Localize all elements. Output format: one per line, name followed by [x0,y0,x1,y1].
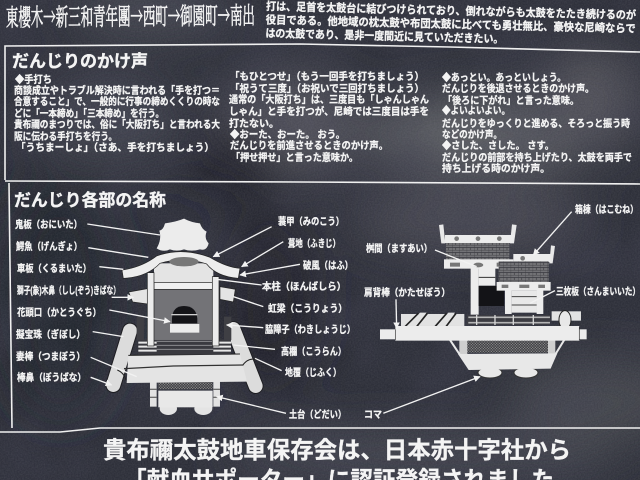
text column 2: ◆おーた、おーた。 おう。 [230,129,345,141]
labels: left of front view: 鰐魚（げんぎょ） [16,240,82,253]
text column 2: 打たない。 [229,117,279,130]
icon: railing base [467,315,550,325]
icon: shoulder beam [380,326,587,341]
text column 1: 阪に伝わる手打ちを行う。 [14,130,117,143]
icon: carrying poles [113,329,257,386]
bottom announcement: 貴布禰太鼓地車保存会は、日本赤十字社から [103,437,571,463]
text column 3: ◆よいよいよい。 [442,105,510,117]
labels: side view [364,203,640,421]
labels: right of front view: 葺地（ふきじ） [288,237,340,250]
labels: right of front view: 地覆（じふく） [285,366,341,379]
text column 1: ◆手打ち [15,73,52,86]
icon: upper wall, beam and columns [147,263,219,346]
labels: left of front view: 花頭口（かとうぐち） [17,306,101,319]
text column 3: 「後ろに下がれ」と言った意味。 [443,94,579,107]
icon: roof [122,252,240,278]
text column 3: などのかけ声。 [442,128,502,141]
icon: body panel with arch [137,288,231,340]
labels: right of front view: 土台（どだい） [289,408,346,421]
labels: left of front view: 擬宝珠（ぎぼし） [16,328,85,341]
text column 2: 「押せ押せ」と言った意味か。 [231,151,358,164]
icon: railing steps [138,339,231,355]
text column 1: 貴布禰のまつりでは、俗に「大阪打ち」と言われる大 [14,118,220,131]
diagram: front view [87,219,300,415]
labels: right of front view: 本柱（ほんばしら） [262,280,346,293]
icon: lower platform [447,333,568,370]
text column 2: だんじりを前進させるときのかけ声。 [230,139,388,152]
bottom announcement [103,437,571,480]
text column 3: ◆さした、さした。 さす。 [442,140,554,152]
text column 2: しゃん」と手を打つが、尼崎では三度目は手を [229,105,429,118]
labels: right of front view [262,215,355,421]
text column 1: 「うちまーしょ」（さあ、手を打ちましょう） [16,141,214,154]
text column 3: ◆あっとい。あっといしょう。 [442,72,566,84]
text column 2 [229,70,429,164]
icon: side wings [129,287,235,304]
text column 2: 通常の「大阪打ち」は、三度目も「しゃんしゃん [229,93,429,106]
text column 1: どに「一本締め」「三本締め」を行う。 [14,107,164,120]
icon: upper roof [439,224,517,269]
labels: left of front view: 車板（くるまいた） [17,262,91,275]
icon: twisted rope [401,311,581,329]
icon: rear panel section [505,290,543,314]
heading: kakegoe: だんじりのかけ声 [12,52,148,71]
labels: right of front view: 蓑甲（みのこう） [278,215,344,228]
icon: lower roof [497,245,555,291]
labels: right of front view: 虹梁（こうりょう） [268,302,347,315]
text column 1: 合意すること」で、一般的に行事の締めくくりの時な [14,95,220,108]
panel: kakegoe calls [12,52,632,175]
text column 1: 商談成立やトラブル解決時に言われる「手を打つ＝ [14,84,220,97]
text column 3: 持ち上げる時のかけ声。 [442,162,550,175]
labels: right of front view: 高欄（こうらん） [281,345,346,358]
side view leader lines [383,212,572,413]
text column 2: 「もひとつせ」（もう一回手を打ちましょう） [230,70,424,83]
diagram: side view [380,212,587,413]
icon: oni-ita cloud crest [157,219,209,251]
text column 1 [14,73,220,154]
intro text block [265,0,636,49]
intro text block: はの太鼓であり、是非一度間近に見ていただきたい。 [265,26,504,46]
right leader lines [213,227,300,413]
labels: side view: コマ [364,410,382,421]
labels: left of front view: 獅子(象)木鼻（しし(ぞう)きばな） [17,284,120,297]
labels: side view: 桝間（ますあい） [366,242,432,255]
labels: left of front view: 棒鼻（ぼうばな） [17,371,86,384]
heading: parts names: だんじり各部の名称 [14,190,166,210]
labels: side view: 肩背棒（かたせぼう） [364,286,450,299]
labels: left of front view [15,218,120,384]
text column 3 [442,72,632,175]
labels: left of front view: 鬼板（おにいた） [15,218,82,231]
icon: platform [124,354,247,383]
text column 2: 「祝うて三度」（お祝いで三回打ちましょう） [230,82,424,95]
icon: wheels [478,367,538,378]
icon: main post section [471,267,504,315]
text column 3: だんじりを後退させるときのかけ声。 [442,82,594,95]
icon: base [150,381,220,415]
labels: right of front view: 破風（はふ） [303,259,353,272]
labels: right of front view: 脇障子（わきしょうじ） [265,323,355,336]
labels: left of front view: 妻棒（つまぼう） [16,350,85,363]
left leader lines [87,224,170,385]
